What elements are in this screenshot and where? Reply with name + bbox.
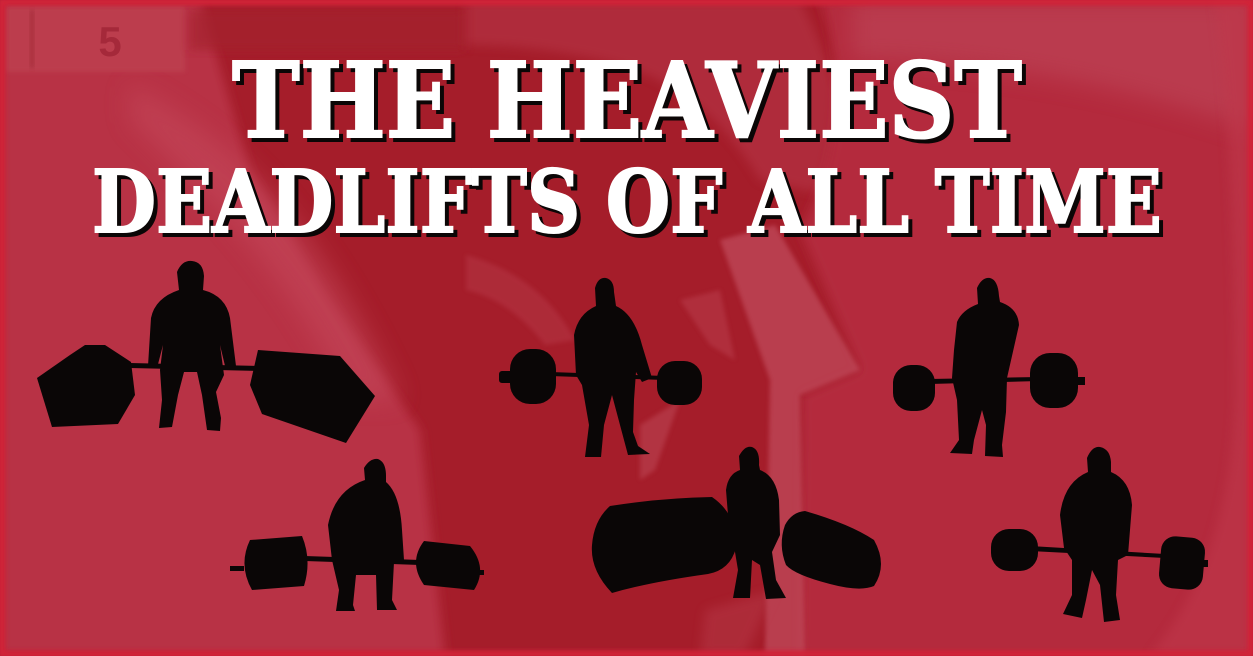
- lifter 5: giant wheels: [592, 447, 881, 599]
- lifter 1: stones: [37, 261, 375, 443]
- title: [92, 39, 1166, 257]
- lifter 3: barbell: [893, 278, 1085, 457]
- lifter 6: barbell: [991, 447, 1208, 622]
- lifter 2: barbell: [499, 278, 702, 457]
- title line 1: THE HEAVIEST: [232, 39, 1022, 162]
- plate number 5: 5: [98, 18, 122, 65]
- title line 1: THE HEAVIEST: [236, 43, 1026, 166]
- lifter 4: barbell: [230, 459, 484, 611]
